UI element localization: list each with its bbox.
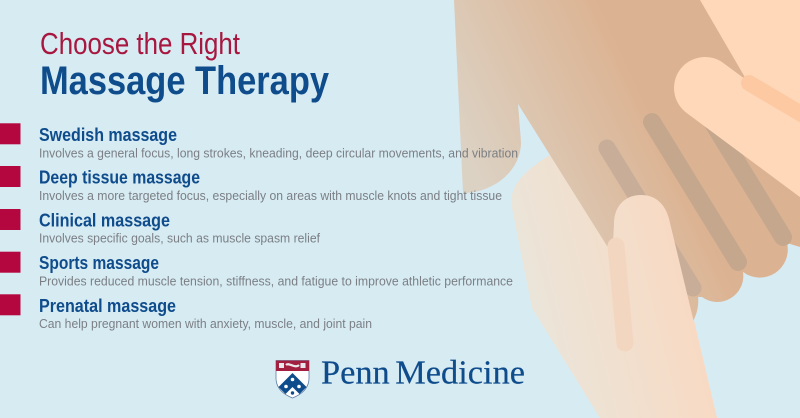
title line 2: Massage Therapy — [40, 59, 330, 103]
logo wordmark: Penn Medicine — [321, 354, 525, 391]
finger line 2 — [652, 122, 738, 262]
list item: Prenatal massage: Prenatal massage — [39, 295, 176, 316]
logo: Penn Medicine — [276, 354, 525, 398]
finger line 3 — [697, 97, 783, 237]
list item: Sports massage: Sports massage — [39, 252, 159, 273]
illustration: thumb of lower hand — [610, 195, 717, 418]
illustration: lower light hand — [511, 154, 717, 418]
list item: Clinical massage: Clinical massage — [39, 209, 170, 230]
list item: Swedish massage — [0, 123, 518, 160]
list item: Clinical massage: Involves specific goals, such as muscle spasm relief — [39, 231, 320, 246]
list item: Clinical massage — [0, 209, 320, 246]
icon: Penn shield — [276, 360, 309, 398]
list item: Deep tissue massage: Involves a more targeted focus, especially on areas with muscle knots and tight tissue — [39, 188, 502, 203]
list item: Sports massage: Provides reduced muscle tension, stiffness, and fatigue to improve athletic performance — [39, 273, 513, 288]
illustration: upper right light hand — [700, 0, 800, 203]
illustration: darker hand — [454, 0, 800, 323]
title — [40, 26, 330, 103]
pressing finger — [705, 88, 800, 203]
list item: Swedish massage: Swedish massage — [39, 124, 177, 145]
finger line 1 — [607, 148, 693, 288]
thumb crease — [616, 246, 625, 343]
list item: Swedish massage: Involves a general focus, long strokes, kneading, deep circular movements, and vibration — [39, 145, 518, 160]
finger crease — [749, 83, 800, 122]
title line 1: Choose the Right — [40, 26, 240, 61]
list item: Sports massage — [0, 252, 513, 288]
list item: Prenatal massage — [0, 294, 372, 331]
list item: Deep tissue massage: Deep tissue massage — [39, 167, 200, 188]
list item: Prenatal massage: Can help pregnant women with anxiety, muscle, and joint pain — [39, 316, 372, 331]
list item: Deep tissue massage — [0, 166, 502, 203]
